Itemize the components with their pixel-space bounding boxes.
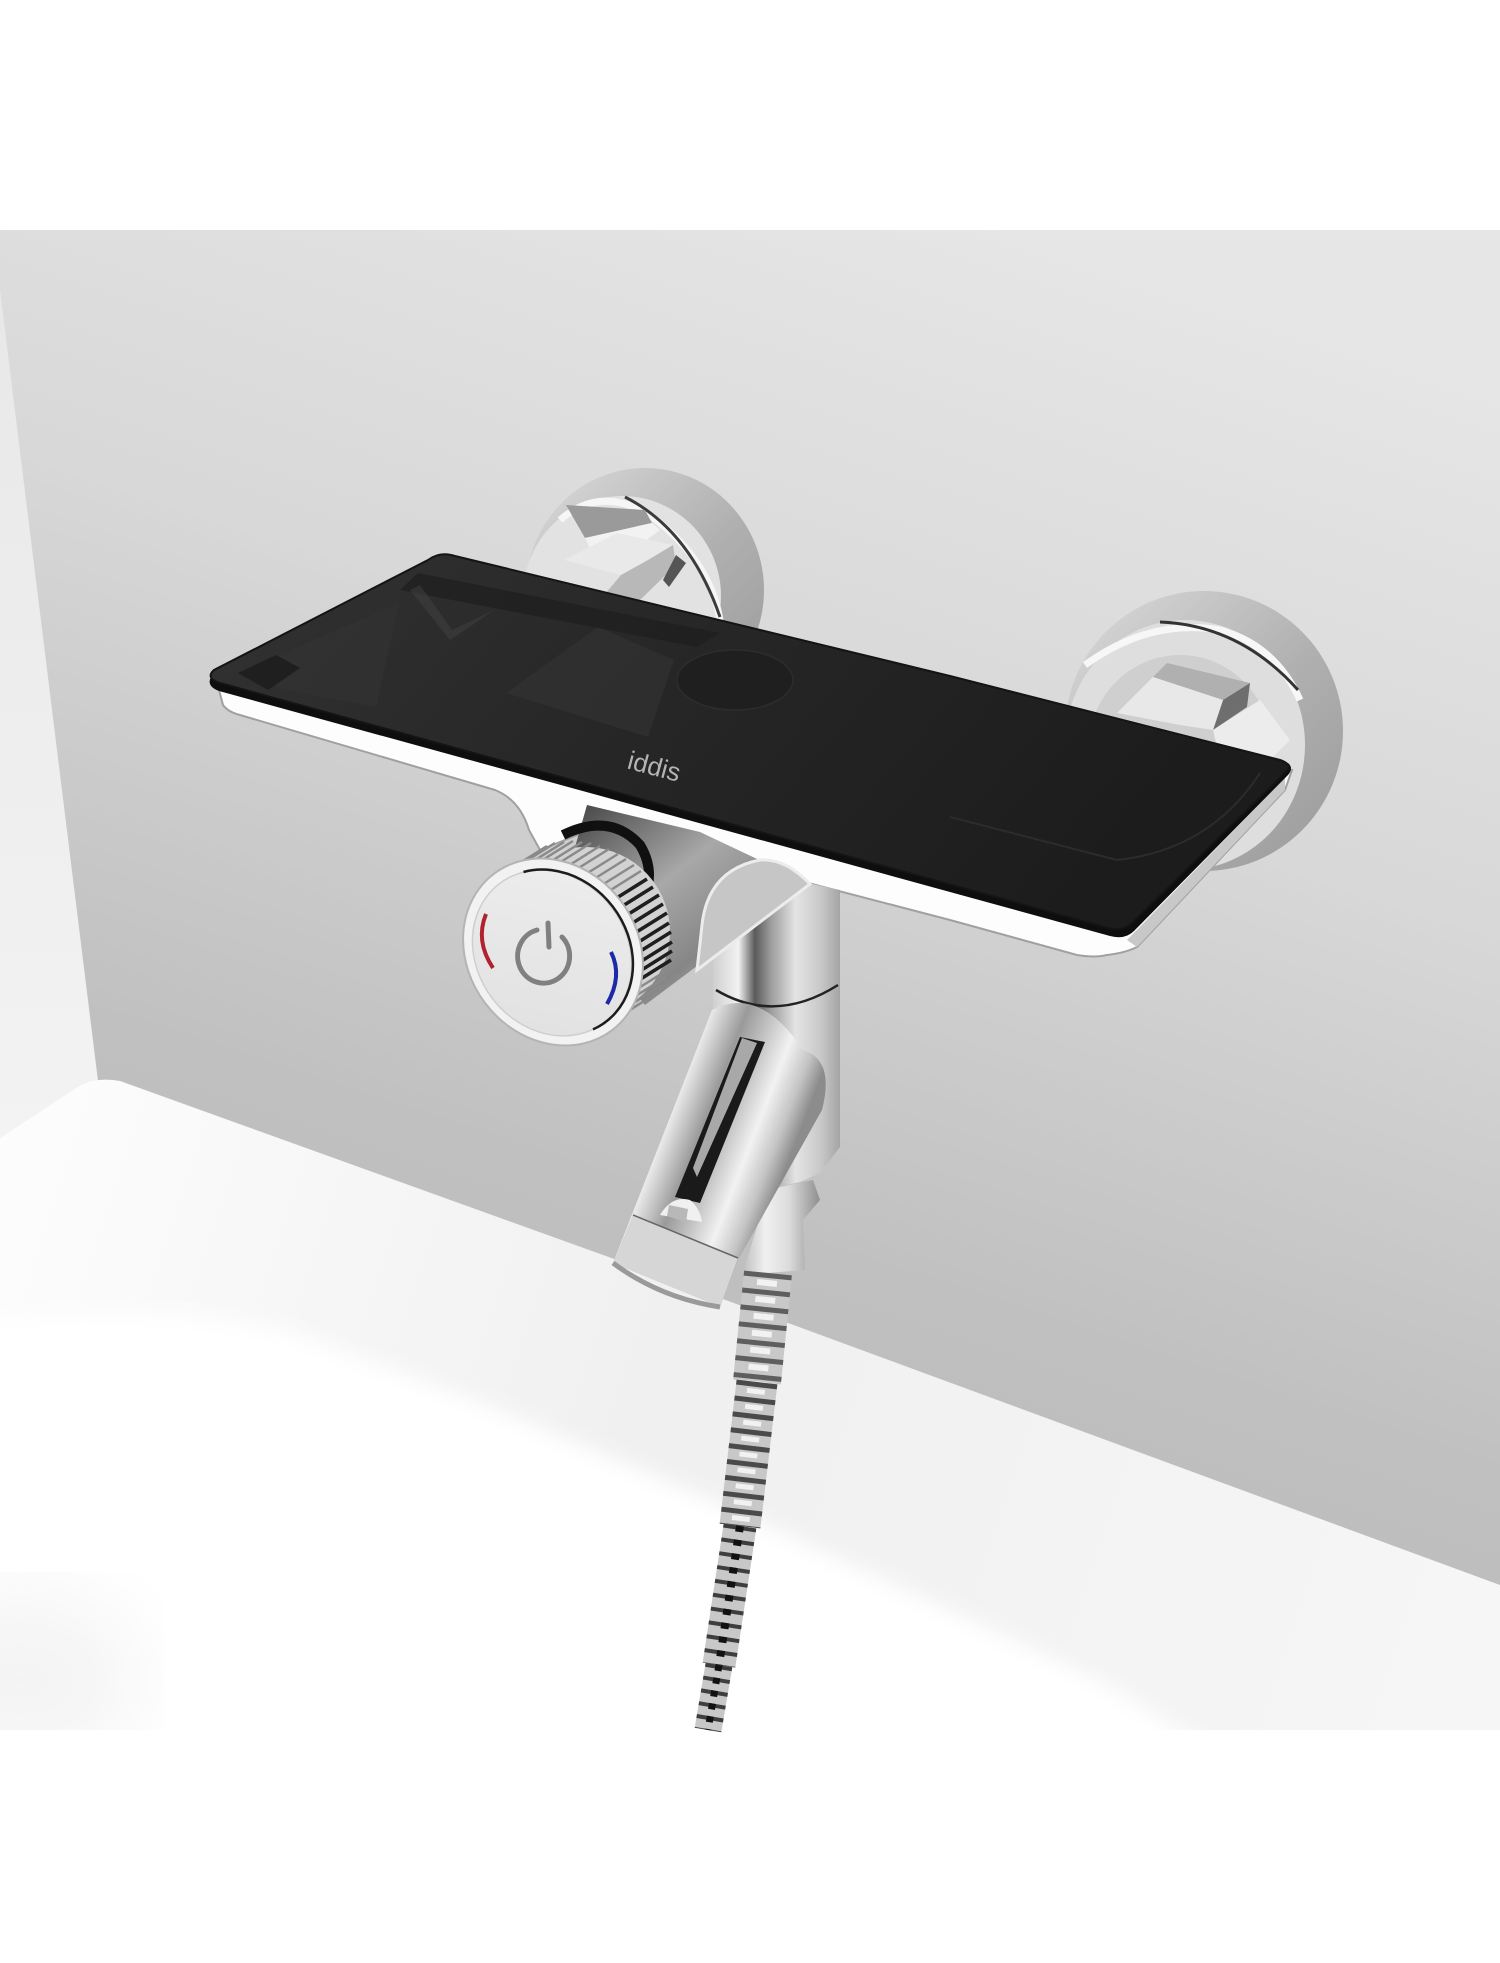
knurling, light section	[515, 841, 641, 891]
bathroom scene	[0, 230, 1500, 1780]
bathtub	[0, 1080, 1500, 1780]
left wall rosette	[523, 468, 764, 712]
hose nut	[742, 1180, 820, 1275]
knurled control knob	[426, 823, 680, 1081]
back wall	[0, 230, 1500, 1630]
hot indicator arc	[482, 914, 493, 968]
iddis logo on glass: iddis	[625, 745, 684, 788]
knob outer rim	[426, 823, 680, 1081]
pull-out spout	[613, 1003, 826, 1307]
product scene: shower mixer in a bathroom	[0, 230, 1500, 1732]
glass reflections	[238, 573, 1260, 860]
side wall	[0, 290, 98, 1138]
right wall rosette	[1065, 591, 1343, 871]
black glass shelf	[210, 554, 1291, 937]
icon: power symbol	[518, 923, 570, 983]
knurling, dark section	[615, 879, 672, 980]
knob face plate	[440, 838, 664, 1068]
spout dark reflection	[675, 1037, 765, 1203]
knurling, lower section	[625, 969, 669, 1013]
shower mixer	[210, 468, 1343, 1730]
shelf chrome underside	[219, 690, 1292, 956]
vertical column	[713, 880, 840, 1190]
flexible shower hose	[708, 1273, 768, 1730]
cold indicator arc	[607, 952, 616, 1004]
knob cylinder	[553, 932, 585, 952]
knob mount body	[560, 805, 810, 1005]
spout tip	[613, 1215, 738, 1307]
